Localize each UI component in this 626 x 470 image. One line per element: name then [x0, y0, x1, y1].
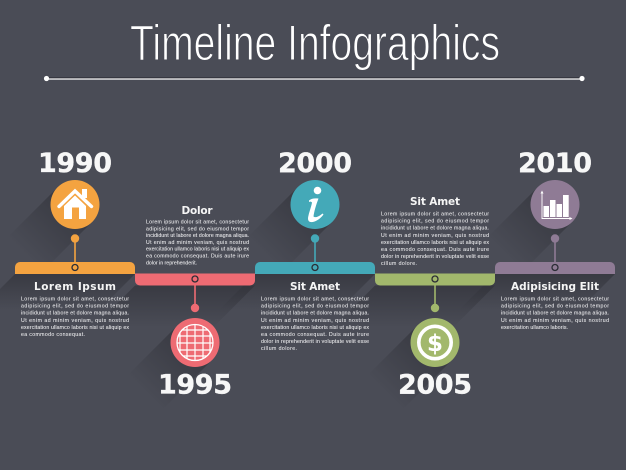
year 2005: 2005: [398, 370, 472, 400]
icon: info: [290, 180, 340, 229]
text block: Sit Amet upper: ea commodo consequat. Duis aute irure: [381, 247, 489, 253]
timeline bar 2010: [495, 262, 615, 274]
text block: Sit Amet upper: incididunt ut labore et dolore magna aliqua.: [381, 226, 489, 232]
connector 1995: [191, 283, 199, 312]
connector 2010: [551, 234, 559, 263]
title: Timeline Infographics: [130, 15, 500, 71]
text block: Dolor: Lorem ipsum dolor sit amet, consectetur: [146, 220, 249, 226]
text block: Lorem Ipsum: Lorem Ipsum: [34, 281, 116, 293]
text block: Adipisicing Elit: Lorem ipsum dolor sit amet, consectetur: [501, 296, 609, 302]
long shadows: [0, 187, 615, 410]
text block: Lorem Ipsum: exercitation ullamco laboris nisi ut aliquip ex: [21, 325, 129, 331]
text block: Dolor: [146, 205, 249, 266]
text block: Dolor: adipisicing elit, sed do eiusmod tempor: [146, 226, 249, 232]
text block: Adipisicing Elit: [501, 281, 609, 331]
text block: Sit Amet lower: incididunt ut labore et dolore magna aliqua.: [261, 311, 369, 317]
text block: Dolor: incididunt ut labore et dolore magna aliqua.: [146, 233, 249, 239]
icon: house: [50, 180, 100, 229]
text block: Sit Amet lower: adipisicing elit, sed do eiusmod tempor: [261, 304, 369, 310]
text block: Dolor: Dolor: [182, 205, 213, 217]
text block: Adipisicing Elit: incididunt ut labore et dolore magna aliqua.: [501, 311, 609, 317]
text block: Sit Amet lower: cillum dolore.: [261, 346, 297, 352]
text block: Sit Amet upper: Sit Amet: [410, 196, 460, 208]
text block: Sit Amet lower: ea commodo consequat. Duis aute irure: [261, 332, 369, 338]
year 2000: 2000: [278, 148, 352, 179]
text block: Dolor: Ut enim ad minim veniam, quis nostrud: [146, 240, 249, 246]
year 1990: 1990: [38, 148, 112, 179]
connector 2005: [431, 283, 439, 312]
text block: Lorem Ipsum: [21, 281, 129, 338]
icon: dollar coin: [410, 318, 460, 367]
year 1995: 1995: [158, 370, 232, 400]
text block: Adipisicing Elit: exercitation ullamco laboris.: [501, 325, 568, 331]
text block: Adipisicing Elit: Adipisicing Elit: [511, 281, 599, 293]
text block: Lorem Ipsum: Lorem ipsum dolor sit amet, consectetur: [21, 296, 129, 302]
text block: Sit Amet upper: exercitation ullamco laboris nisi ut aliquip ex: [381, 240, 489, 246]
text block: Sit Amet upper: Ut enim ad minim veniam, quis nostrud: [381, 233, 489, 239]
text block: Dolor: exercitation ullamco laboris nisi ut aliquip ex: [146, 247, 249, 253]
text block: Lorem Ipsum: incididunt ut labore et dolore magna aliqua.: [21, 311, 129, 317]
icon: bar chart: [530, 180, 580, 229]
year 2010: 2010: [518, 148, 592, 179]
text block: Dolor: dolor in reprehenderit.: [146, 260, 197, 266]
text block: Adipisicing Elit: Ut enim ad minim veniam, quis nostrud: [501, 318, 609, 324]
text block: Lorem Ipsum: Ut enim ad minim veniam, quis nostrud: [21, 318, 129, 324]
timeline bar 1990: [15, 262, 135, 274]
text block: Sit Amet upper: Lorem ipsum dolor sit amet, consectetur: [381, 212, 489, 218]
text block: Sit Amet upper: dolor in reprehenderit in voluptate velit esse: [381, 254, 489, 260]
text block: Sit Amet lower: Lorem ipsum dolor sit amet, consectetur: [261, 296, 369, 302]
text block: Sit Amet lower: exercitation ullamco laboris nisi ut aliquip ex: [261, 325, 369, 331]
timeline bar 1995: [135, 274, 255, 286]
connector 2000: [311, 234, 319, 263]
title rule: [44, 76, 585, 81]
text block: Lorem Ipsum: adipisicing elit, sed do eiusmod tempor: [21, 304, 129, 310]
text block: Dolor: ea commodo consequat. Duis aute irure: [146, 254, 249, 260]
text block: Lorem Ipsum: ea commodo consequat.: [21, 332, 85, 338]
timeline bar 2000: [255, 262, 375, 274]
connector 1990: [71, 234, 79, 263]
text block: Adipisicing Elit: adipisicing elit, sed do eiusmod tempor: [501, 304, 609, 310]
text block: Sit Amet upper: [381, 196, 489, 267]
text block: Sit Amet lower: Sit Amet: [290, 281, 340, 293]
text block: Sit Amet lower: Ut enim ad minim veniam, quis nostrud: [261, 318, 369, 324]
text block: Sit Amet lower: dolor in reprehenderit in voluptate velit esse: [261, 339, 369, 345]
timeline bar 2005: [375, 274, 495, 286]
text block: Sit Amet upper: adipisicing elit, sed do eiusmod tempor: [381, 219, 489, 225]
icon: dollar coin: $: [427, 331, 443, 357]
text block: Sit Amet upper: cillum dolore.: [381, 261, 417, 267]
icon: globe grid: [170, 318, 220, 367]
text block: Sit Amet lower: [261, 281, 369, 352]
